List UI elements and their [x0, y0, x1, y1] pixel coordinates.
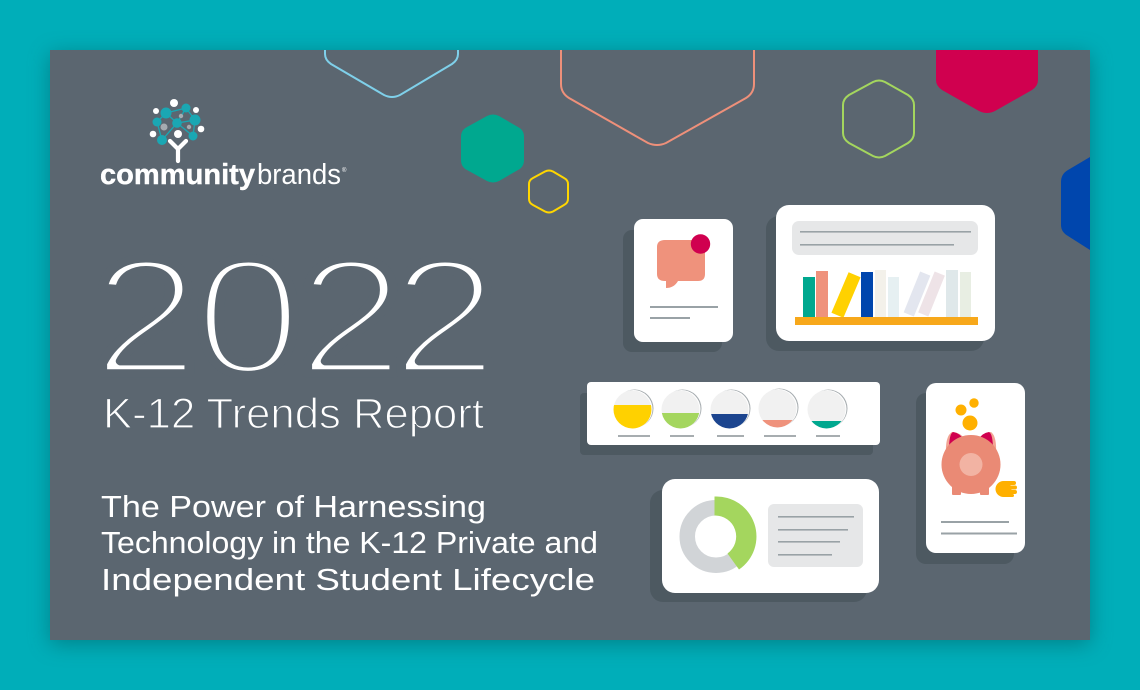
books — [803, 270, 971, 318]
text block: description: Technology in the K-12 Private and — [101, 526, 598, 560]
card: bookshelf — [766, 205, 995, 351]
card: chat notification — [623, 219, 733, 352]
gauge: navy — [710, 390, 750, 428]
icon: coins — [956, 398, 979, 430]
hexagon: lime outline — [843, 80, 914, 158]
decorative hexagons — [325, 50, 1090, 250]
gauge: salmon — [758, 388, 798, 428]
hexagon: salmon outline — [561, 50, 754, 145]
text block: description: Independent Student Lifecycle — [101, 563, 595, 597]
subtitle: K-12 Trends Report: K-12 Trends Report — [103, 390, 484, 438]
text box — [792, 221, 978, 255]
icon: piggy — [942, 432, 1000, 495]
icon: speech bubble — [657, 234, 710, 288]
text block: description: The Power of Harnessing — [101, 490, 486, 524]
gauge: yellow — [614, 390, 654, 428]
shelf — [795, 317, 978, 325]
text lines — [941, 521, 1017, 534]
icon: tree logo — [150, 99, 204, 161]
card: piggy bank — [916, 383, 1025, 564]
gauge: green — [662, 390, 702, 428]
hexagon: blue solid — [1061, 157, 1090, 250]
title: 2022: 2022 — [93, 224, 498, 409]
logo: community brands — [100, 99, 347, 191]
text block: description — [101, 490, 598, 597]
hexagon: crimson solid — [936, 50, 1038, 113]
labels — [618, 435, 840, 437]
hexagon: light blue outline — [325, 50, 458, 97]
card: percentage circles — [580, 382, 880, 455]
text box — [768, 504, 863, 567]
hexagon: green solid — [461, 114, 524, 182]
gauge: teal — [808, 390, 848, 428]
donut chart — [687, 496, 756, 570]
logo registered mark: ® — [342, 167, 347, 174]
icon: coin stack — [996, 481, 1017, 497]
card: donut chart — [650, 479, 879, 602]
hexagon: yellow outline — [529, 170, 568, 212]
panel: slate background — [50, 50, 1090, 640]
logo wordmark: communitybrands — [100, 159, 341, 191]
text lines — [650, 306, 718, 319]
